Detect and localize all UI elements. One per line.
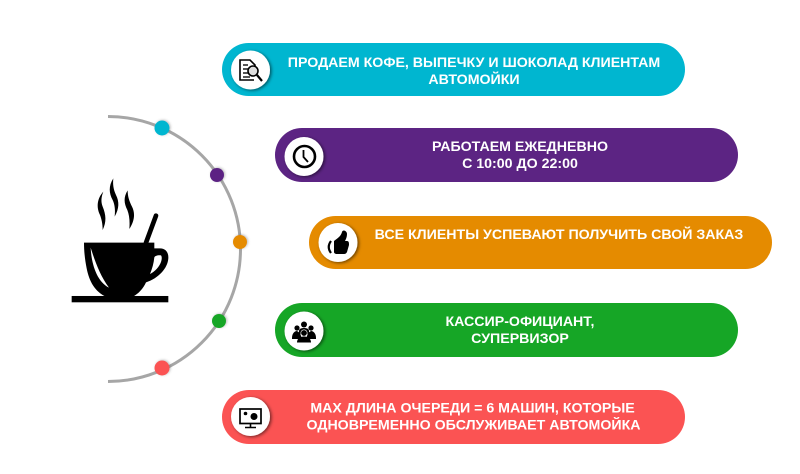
cup body and handle — [84, 243, 168, 297]
timeline dots — [154, 120, 247, 376]
text: sales: ПРОДАЕМ КОФЕ, ВЫПЕЧКУ И ШОКОЛАД КЛИЕНТАМ — [288, 55, 660, 71]
icon: coffee cup — [72, 178, 168, 302]
icon: people — [284, 312, 324, 350]
icon: clock — [284, 137, 324, 176]
icon: thumbs up — [318, 223, 358, 262]
icon: monitor gears — [231, 397, 270, 436]
panel: sales: АВТОМОЙКИ — [428, 70, 520, 88]
text: staff: КАССИР-ОФИЦИАНТ, — [445, 314, 595, 330]
panel: staff — [275, 303, 738, 357]
icon: document magnifier — [231, 50, 270, 90]
text: orders: ВСЕ КЛИЕНТЫ УСПЕВАЮТ ПОЛУЧИТЬ СВОЙ ЗАКАЗ — [375, 225, 743, 243]
panel: sales — [222, 43, 685, 96]
semicircular arc — [108, 116, 240, 382]
panel: queue — [222, 390, 685, 444]
panel: schedule: С 10:00 ДО 22:00 — [462, 156, 578, 172]
saucer — [72, 296, 168, 302]
panel: staff: СУПЕРВИЗОР — [471, 331, 569, 347]
steam — [98, 192, 105, 230]
text: queue: МАХ ДЛИНА ОЧЕРЕДИ = 6 МАШИН, КОТОРЫЕ — [310, 400, 635, 416]
panel: schedule — [275, 128, 738, 182]
panel: queue: ОДНОВРЕМЕННО ОБСЛУЖИВАЕТ АВТОМОЙКА — [306, 416, 641, 434]
panel: orders — [309, 216, 772, 269]
text: schedule: РАБОТАЕМ ЕЖЕДНЕВНО — [432, 139, 608, 155]
spoon — [146, 216, 156, 243]
